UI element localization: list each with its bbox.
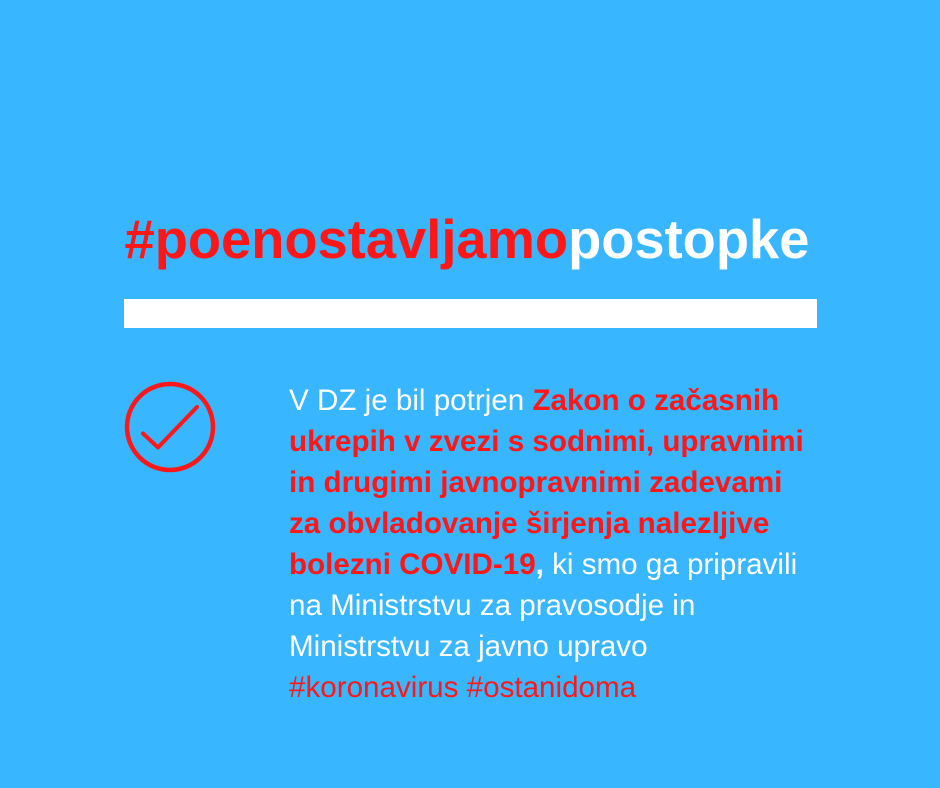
body text: Ministrstvu za javno upravo [289,630,648,663]
body text: za obvladovanje širjenja nalezljive [289,507,769,540]
title: #poenostavljamopostopke [124,209,809,270]
white divider bar [124,299,817,328]
body text: bolezni COVID-19, ki smo ga pripravili [289,548,797,581]
body text: #koronavirus #ostanidoma [289,671,636,704]
body text: na Ministrstvu za pravosodje in [289,589,695,622]
body text [289,384,804,704]
body text: ukrepih v zvezi s sodnimi, upravnimi [289,425,804,458]
body text: in drugimi javnopravnimi zadevami [289,466,782,499]
body text: V DZ je bil potrjen Zakon o začasnih [289,384,779,417]
icon: check mark in circle [124,382,216,472]
